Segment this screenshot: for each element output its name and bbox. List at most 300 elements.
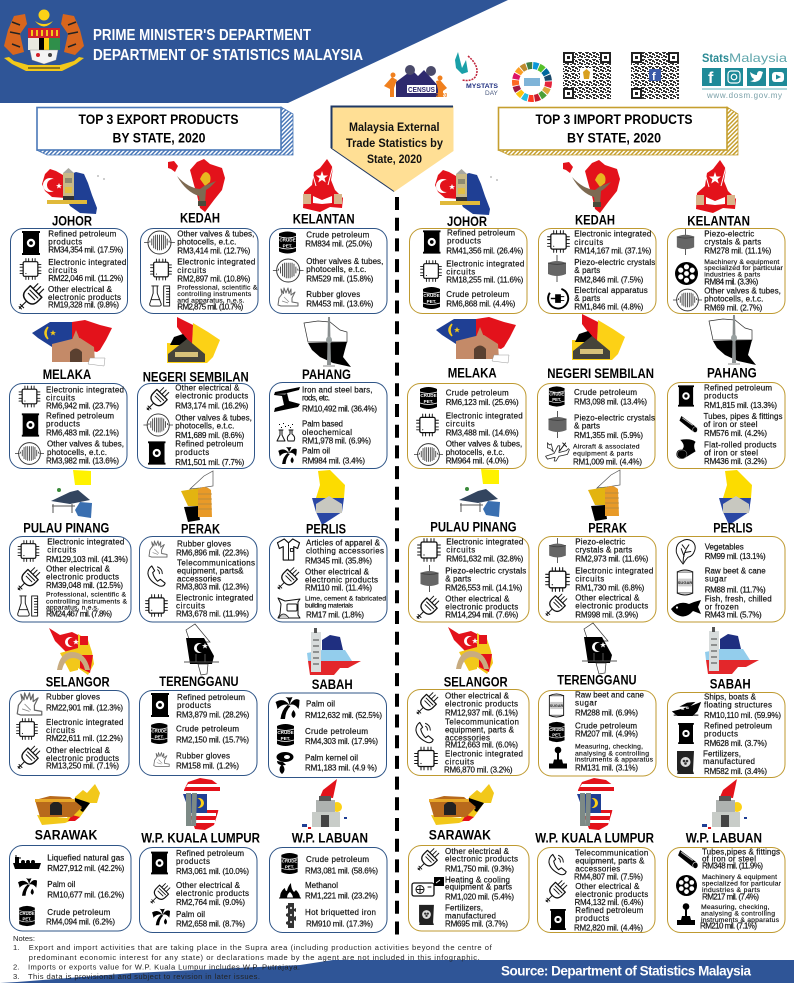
icon: integrated circuit chip (546, 568, 569, 591)
heading: KEDAH imports: KEDAH (575, 213, 615, 228)
text: measuring instruments: Measuring, checking, (575, 744, 643, 751)
logo: MyStats Day (455, 52, 499, 97)
text: hot briquetted iron: RM910 mil. (17.3%) (306, 920, 373, 929)
heading: PERAK exports: PERAK (181, 521, 220, 536)
icon: crude petroleum barrel: PET. (424, 399, 433, 404)
heading: PERLIS exports: PERLIS (306, 521, 346, 536)
heading panel: top 3 export products: TOP 3 EXPORT PRODUCTS (78, 111, 238, 127)
icon: machinery wheel (675, 262, 698, 285)
text: iron and steel bars: RM10,492 mil. (36.4%) (302, 405, 377, 414)
text: palm oil: RM984 mil. (3.4%) (302, 456, 365, 465)
icon: crude petroleum barrel (423, 287, 440, 309)
text: electronic integrated circuits: circuits (46, 394, 75, 403)
state map: Kelantan exports (303, 159, 343, 212)
icon: valve (414, 444, 443, 465)
text: machinery and equipment: industries & parts (702, 887, 761, 894)
text: electronic integrated circuits: circuits (446, 420, 475, 429)
text: fish fresh chilled or frozen: or frozen (705, 603, 739, 612)
text: other valves and tubes: photocells, e.t.c. (177, 238, 236, 247)
heading: MELAKA imports: MELAKA (448, 365, 497, 380)
icon: sugar bag: SUGAR (678, 580, 692, 585)
header title: DEPARTMENT OF STATISTICS MALAYSIA (93, 47, 363, 64)
icon: palm tree (276, 697, 300, 719)
icon: crude petroleum barrel: PET. (552, 397, 561, 402)
text: crude petroleum: RM3,098 mil. (13.4%) (574, 398, 647, 407)
text: crude petroleum (305, 727, 378, 746)
text: telecommunication equipment: RM12,663 mil. (6.0%) (445, 741, 518, 750)
text: measuring instruments: instruments & apparatus (701, 917, 780, 924)
icon: refined petroleum barrel (678, 723, 694, 744)
text: telecommunication equipment: equipment, parts & (445, 726, 515, 735)
panel: Perlis imports (668, 536, 785, 622)
text: telecommunications equipment: accessories (177, 574, 221, 583)
notes: Imports or exports value for W.P. Kuala Lumpur includes W.P. Putrajaya. (28, 963, 300, 972)
text: telecommunications equipment (176, 558, 255, 591)
text: articles of apparel: RM345 mil. (35.8%) (305, 557, 372, 566)
notes: 3. (13, 972, 19, 981)
icon: crude petroleum barrel (549, 722, 565, 742)
text: telecommunications equipment: equipment, parts& (177, 566, 244, 575)
icon: integrated circuit chip (18, 540, 40, 562)
icon: plug in circle (548, 289, 568, 309)
icon: hot briquetted iron (286, 903, 296, 928)
text: fertilizers manufactured (445, 903, 508, 929)
icon: joystick instrument (677, 903, 695, 925)
text: refined petroleum products (446, 228, 524, 256)
icon: electric plug (413, 846, 442, 874)
icon: fish (671, 600, 701, 616)
text: refined petroleum products: RM3,879 mil. (28.2%) (176, 711, 250, 720)
text: measuring instruments: RM131 mil. (3.1%) (575, 764, 638, 773)
icon: electric plug (541, 592, 570, 620)
text: other electrical products (575, 594, 648, 620)
text: palm oil (47, 880, 125, 899)
panel: Melaka exports (10, 384, 127, 468)
icon: crude petroleum barrel (151, 723, 168, 744)
icon: palm tree (18, 878, 37, 896)
icon: chemical flasks (276, 423, 296, 442)
text: flat-rolled products: Flat-rolled products (704, 441, 776, 450)
text: refined petroleum products (704, 722, 772, 748)
state map: Melaka imports (436, 317, 516, 363)
text: crude petroleum (574, 388, 647, 407)
icon: integrated circuit chip (18, 386, 40, 408)
text: electronic integrated circuits (446, 260, 524, 285)
text: refined petroleum products: products (177, 701, 211, 710)
text: machinery and equipment (702, 874, 782, 902)
text: liquefied natural gas: Liquefied natural gas (47, 854, 124, 863)
text: palm kernel oil: RM1,183 mil. (4.9 %) (305, 764, 377, 773)
icon: aircraft and tools (546, 443, 569, 461)
text: refined petroleum products (176, 693, 250, 720)
text: electronic integrated circuits: Electronic integrated (176, 594, 254, 603)
icon: iron beam (274, 387, 300, 412)
text: piezo-electric crystals: Piezo-electric (575, 538, 625, 547)
text: electronic integrated circuits: Electronic integrated (46, 718, 124, 727)
panel: Perak exports (140, 536, 257, 622)
text: electronic integrated circuits (46, 386, 124, 411)
icon: crude petroleum barrel: CRUDE (277, 730, 294, 735)
icon: telephone (416, 722, 433, 743)
panel: Kelantan exports (270, 228, 387, 314)
text: refined petroleum products: Refined petroleum (447, 228, 515, 237)
text: ships, boats and floating structures: RM10,110 mil. (59.9%) (704, 711, 781, 720)
icon: methanol flames (279, 883, 301, 898)
text: electronic integrated circuits: Electronic integrated (446, 260, 524, 269)
icon: refined petroleum barrel (151, 852, 168, 874)
icon: rubber gloves (153, 752, 170, 767)
heading: KELANTAN imports: KELANTAN (687, 214, 750, 229)
heading: SABAH exports: SABAH (312, 677, 353, 692)
StatsMalaysia social block (702, 51, 787, 100)
text: rubber gloves (176, 752, 239, 771)
text: crude petroleum: Crude petroleum (574, 388, 637, 397)
state map: Pahang imports (709, 315, 756, 365)
text: refined petroleum products: products (447, 237, 481, 246)
text: crude petroleum: RM2,150 mil. (15.7%) (176, 736, 249, 745)
text: other valves and tubes: photocells, e.t.c. (175, 422, 234, 431)
text: crude petroleum (305, 231, 373, 249)
text: vegetables: Vegetables (705, 543, 744, 552)
state map: W.P. Kuala Lumpur imports (577, 778, 614, 830)
icon: refined petroleum barrel (148, 441, 166, 465)
heading panel: top 3 import products: BY STATE, 2020 (567, 130, 661, 146)
notes: Notes: (13, 934, 35, 943)
text: hot briquetted iron (305, 908, 376, 929)
icon: integrated circuit chip (421, 261, 441, 281)
text: piezo-electric crystals: & parts (574, 266, 600, 275)
icon: valve (673, 289, 702, 311)
icon: refined petroleum barrel (22, 231, 40, 255)
text: methanol (305, 881, 378, 901)
text: electronic integrated circuits: RM129,103 mil. (41.3%) (46, 555, 128, 564)
text: other valves and tubes: Other valves & tubes, (446, 440, 522, 449)
text: measuring instruments: analysing & controlling (575, 750, 649, 757)
icon: integrated circuit chip (20, 258, 42, 280)
text: other valves and tubes: Other valves & tubes, (175, 414, 252, 423)
heading: SELANGOR imports: SELANGOR (444, 675, 508, 690)
text: other valves and tubes: photocells, e.t.c. (306, 265, 366, 274)
text: other electrical products: RM110 mil. (11.4%) (305, 584, 372, 593)
icon: valve (272, 258, 304, 282)
icon: crude petroleum barrel: CRUDE (423, 293, 440, 298)
text: tubes, pipes and fittings: Tubes,pipes & fittings (702, 848, 780, 857)
icon: flask and ruler (17, 596, 38, 616)
panel: Johor imports (410, 228, 527, 314)
text: fertilizers manufactured: RM695 mil. (3.7%) (445, 920, 508, 929)
notes: This data is provisional and subject to revision in later issues. (28, 972, 260, 981)
text: electronic integrated circuits (575, 567, 653, 592)
text: electronic integrated circuits: RM6,870 mil. (3.2%) (444, 766, 513, 775)
icon: crude petroleum barrel (420, 387, 437, 409)
panel: W.P. Labuan imports (668, 848, 785, 932)
text: other electrical products: Other electrical & (445, 847, 510, 856)
text: electronic integrated circuits: Electronic integrated (575, 567, 653, 576)
text: fish fresh chilled or frozen (705, 595, 772, 620)
text: other electrical products: RM3,174 mil. (16.2%) (175, 402, 249, 411)
panel: Pulau Pinang exports (10, 536, 131, 622)
icon: crude petroleum barrel: CRUDE (282, 859, 297, 864)
icon: electric plug (18, 283, 44, 310)
text: other valves and tubes: photocells, e.t.c. (446, 448, 505, 457)
text: rubber gloves: RM6,896 mil. (22.3%) (176, 549, 249, 558)
text: fertilizers manufactured: manufactured (445, 911, 496, 920)
state map: Kedah imports (563, 160, 620, 213)
state map: Negeri Sembilan exports (167, 317, 220, 363)
text: electronic integrated circuits (46, 718, 124, 743)
text: palm oil (305, 700, 382, 720)
text: measuring instruments (700, 904, 780, 930)
heading: SARAWAK imports: SARAWAK (429, 827, 491, 842)
text: refined petroleum products: Refined petroleum (704, 384, 772, 393)
text: fertilizers manufactured: Fertilizers, (445, 903, 483, 912)
panel: Negeri Sembilan imports (538, 384, 655, 468)
text: rubber gloves: RM453 mil. (13.6%) (306, 300, 374, 309)
text: raw beet and cane sugar: Raw beet & cane (705, 567, 766, 576)
text: piezo-electric crystals: RM26,553 mil. (14.1%) (445, 583, 523, 592)
text: crude petroleum: RM3,081 mil. (58.6%) (305, 866, 378, 875)
icon: palm kernel (276, 752, 294, 774)
text: crude petroleum: RM4,094 mil. (6.2%) (46, 918, 115, 927)
text: other electrical products (46, 565, 123, 590)
icon: ship (672, 702, 701, 716)
text: other electrical products: electronic products (175, 392, 248, 401)
text: other valves and tubes (704, 287, 781, 312)
text: tubes, pipes and fittings (704, 412, 782, 438)
text: piezo-electric crystals: & parts (445, 575, 471, 584)
text: lime cement building materials (305, 596, 386, 619)
panel: Pahang imports (668, 382, 785, 468)
heading: PAHANG imports: PAHANG (707, 365, 757, 380)
text: refined petroleum products: Refined petroleum (575, 906, 644, 915)
icon: valve (15, 442, 44, 465)
text: crude petroleum: RM834 mil. (25.0%) (305, 240, 373, 249)
text: other electrical products: RM998 mil. (3.9%) (575, 611, 639, 620)
text: machinery and equipment: industries & parts (704, 271, 761, 278)
text: crude petroleum (46, 908, 115, 927)
text: crude petroleum: Crude petroleum (446, 389, 509, 398)
text: heating and cooling equipment (445, 876, 514, 902)
text: other electrical products: electronic products (176, 889, 249, 898)
text: aircraft and equipment: Aircraft & associated (573, 443, 640, 450)
text: other valves and tubes: RM964 mil. (4.0%) (446, 456, 509, 465)
text: rubber gloves: Rubber gloves (177, 540, 231, 549)
text: professional scientific instruments: apparatus, n.e.s. (46, 605, 99, 612)
panel: Pulau Pinang imports (408, 536, 529, 623)
text: machinery and equipment: specialized for particular (704, 265, 784, 272)
text: other electrical products (445, 595, 519, 620)
text: refined petroleum products: products (175, 448, 209, 457)
text: refined petroleum products: Refined petroleum (46, 412, 114, 421)
text: refined petroleum products (46, 412, 119, 437)
state map: Terengganu exports (184, 624, 219, 675)
panel: Kedah imports (538, 228, 656, 314)
text: hot briquetted iron: Hot briquetted iron (305, 908, 376, 917)
panel: Melaka imports (408, 384, 526, 468)
text: refined petroleum products: RM628 mil. (3.7%) (704, 739, 767, 748)
text: fertilizers manufactured (703, 750, 767, 776)
icon: piezo-electric crystal (549, 538, 566, 563)
text: refined petroleum products (175, 440, 245, 467)
state map: W.P. Labuan exports (302, 779, 347, 829)
text: piezo-electric crystals: crystals & parts (575, 546, 632, 555)
text: machinery and equipment (704, 259, 784, 287)
text: other electrical products: RM14,294 mil. (7.6%) (445, 611, 519, 620)
text: refined petroleum products: RM2,820 mil. (4.4%) (574, 924, 643, 933)
text: other electrical products (46, 746, 119, 771)
text: electronic integrated circuits: circuits (446, 546, 475, 555)
text: telecommunication equipment: accessories (575, 865, 620, 874)
icon: integrated circuit chip (417, 414, 438, 436)
text: telecommunications equipment: RM3,803 mil. (12.3%) (176, 582, 249, 591)
text: other electrical products: electronic products (575, 890, 648, 899)
text: electrical apparatus: & parts (574, 294, 600, 303)
text: refined petroleum products: Refined petroleum (704, 722, 772, 731)
icon: electric plug (412, 594, 442, 623)
icon: crude petroleum barrel: CRUDE (20, 911, 35, 916)
text: other electrical products: Other electrical & (46, 746, 111, 755)
text: other valves and tubes: RM69 mil. (2.7%) (704, 303, 763, 312)
text: electronic integrated circuits: Electronic integrated (177, 258, 255, 267)
text: aircraft and equipment: RM1,009 mil. (4.4%) (573, 458, 642, 467)
text: measuring instruments: RM210 mil. (7.1%) (700, 921, 757, 930)
heading: PULAU PINANG exports: PULAU PINANG (23, 521, 109, 536)
heading: PAHANG exports: PAHANG (302, 367, 351, 382)
text: electronic integrated circuits (446, 411, 523, 437)
text: telecommunication equipment: accessories (445, 734, 490, 743)
text: crude petroleum: Crude petroleum (446, 290, 510, 299)
text: tubes, pipes and fittings: RM576 mil. (4.2%) (704, 429, 767, 438)
icon: crude petroleum barrel (281, 853, 298, 874)
text: methanol: RM1,221 mil. (23.2%) (305, 892, 378, 901)
text: electronic integrated circuits: circuits (46, 726, 75, 735)
text: refined petroleum products: Refined petroleum (175, 440, 244, 449)
text: palm based oleochemical: oleochemical (302, 428, 352, 437)
text: palm based oleochemical: Palm based (302, 420, 343, 429)
icon: palm tree (278, 447, 297, 464)
StatsMalaysia social block: Stats (702, 51, 729, 65)
text: refined petroleum products (176, 849, 249, 876)
icon: vegetable leaf (676, 539, 695, 564)
icon: fertilizer bag (419, 905, 434, 925)
logo: census 2020 (384, 65, 447, 99)
text: electronic integrated circuits: RM22,046 mil. (11.2%) (48, 274, 124, 283)
text: palm oil: Palm oil (306, 700, 335, 709)
heading: TERENGGANU exports: TERENGGANU (159, 674, 239, 689)
text: electronic integrated circuits (446, 538, 524, 563)
icon: crude petroleum barrel: CRUDE (549, 392, 564, 397)
state map: Sarawak imports (429, 784, 494, 825)
text: measuring instruments: instruments & apparatus (575, 756, 654, 764)
text: articles of apparel: clothing accessories (306, 547, 384, 556)
icon: refined petroleum barrel (678, 385, 694, 407)
text: professional scientific instruments: controlling instruments & (46, 598, 127, 605)
text: palm oil: Palm oil (176, 910, 205, 919)
text: rubber gloves (176, 540, 249, 558)
text: tubes, pipes and fittings: of iron or steel (704, 420, 758, 429)
text: fertilizers manufactured: manufactured (703, 757, 755, 766)
panel: Selangor imports (408, 690, 529, 776)
icon: valve (144, 230, 175, 254)
text: professional scientific instruments: and apparatus, n.e.s. (177, 297, 244, 304)
heading panel: top 3 import products (498, 107, 738, 155)
text: piezo-electric crystals: Piezo-electric crystals (574, 258, 655, 267)
text: ships, boats and floating structures: floating structures (704, 701, 772, 710)
notes (13, 934, 493, 981)
text: other electrical products (305, 568, 378, 593)
text: refined petroleum products: products (46, 420, 80, 429)
text: other electrical products: RM13,250 mil. (7.1%) (46, 762, 119, 771)
text: electronic integrated circuits: Electronic integrated (445, 750, 523, 759)
icon: crude petroleum barrel: CRUDE (151, 729, 167, 734)
heading: MELAKA exports: MELAKA (43, 367, 91, 382)
heading: PERLIS imports: PERLIS (713, 521, 753, 536)
text: other valves and tubes (177, 230, 254, 255)
text: piezo-electric crystals (445, 567, 526, 592)
text: piezo-electric crystals: RM278 mil. (11.1%) (704, 246, 772, 255)
text: electronic integrated circuits (177, 258, 255, 283)
QR code: Facebook (631, 52, 679, 99)
footer wedge (0, 960, 794, 983)
text: lime cement building materials: Lime, cement & fabricated (305, 596, 386, 603)
notes: Export and import activities that are taking place in the Supra area (including production activities beyond the centre of (29, 943, 493, 952)
text: palm oil: RM12,632 mil. (52.5%) (305, 711, 382, 720)
heading: W.P. KUALA LUMPUR imports: W.P. KUALA LUMPUR (535, 831, 654, 846)
heading: SARAWAK exports: SARAWAK (35, 827, 98, 842)
centre dashed divider (395, 197, 399, 938)
text: electronic integrated circuits: circuits (177, 266, 206, 275)
text: other electrical products: Other electrical & (445, 692, 510, 701)
text: palm oil (176, 910, 245, 929)
text: measuring instruments: analysing & controlling (701, 911, 775, 918)
text: piezo-electric crystals (574, 414, 655, 440)
icon: crude petroleum barrel: CRUDE (279, 238, 296, 242)
text: piezo-electric crystals (704, 230, 772, 255)
icon: refined petroleum barrel (550, 909, 566, 930)
text: tubes, pipes and fittings: Tubes, pipes & fittings (704, 412, 782, 421)
text: other valves and tubes (175, 414, 252, 440)
icon: sugar bag: SUGAR (550, 704, 564, 708)
StatsMalaysia social block: Malaysia (729, 51, 787, 65)
text: refined petroleum products: RM34,354 mil. (17.5%) (48, 246, 124, 255)
text: flat-rolled products: RM436 mil. (3.2%) (704, 457, 767, 466)
text: electronic integrated circuits: Electronic integrated (48, 258, 126, 267)
state map: Selangor imports (448, 627, 493, 674)
StatsMalaysia social block: f (708, 70, 714, 87)
text: vegetables (705, 543, 766, 561)
text: machinery and equipment: specialized for particular (702, 881, 782, 888)
text: other valves and tubes (306, 257, 383, 284)
text: telecommunication equipment: Telecommunication (445, 718, 519, 727)
text: refined petroleum products (574, 906, 644, 933)
text: crude petroleum: Crude petroleum (47, 908, 111, 917)
text: piezo-electric crystals: RM2,973 mil. (11.6%) (575, 554, 649, 563)
text: rubber gloves: RM158 mil. (1.2%) (176, 762, 239, 771)
text: crude petroleum: RM4,303 mil. (17.9%) (305, 737, 378, 746)
text: refined petroleum products: products (48, 238, 82, 247)
header title: PRIME MINISTER'S DEPARTMENT (93, 27, 311, 44)
text: other electrical products: Other electrical & (445, 595, 510, 604)
text: refined petroleum products: products (176, 857, 210, 866)
panel: Perlis exports (270, 536, 387, 622)
panel: Negeri Sembilan exports (138, 384, 254, 468)
QR code: Facebook: f (652, 71, 656, 83)
icon: crude petroleum barrel (19, 906, 35, 926)
panel: Sarawak exports (10, 846, 131, 931)
text: heating and cooling equipment: RM1,020 mil. (5.4%) (445, 893, 514, 902)
text: professional scientific instruments: Professional, scientific & (46, 592, 126, 599)
icon: crude petroleum barrel: CRUDE (420, 393, 437, 398)
